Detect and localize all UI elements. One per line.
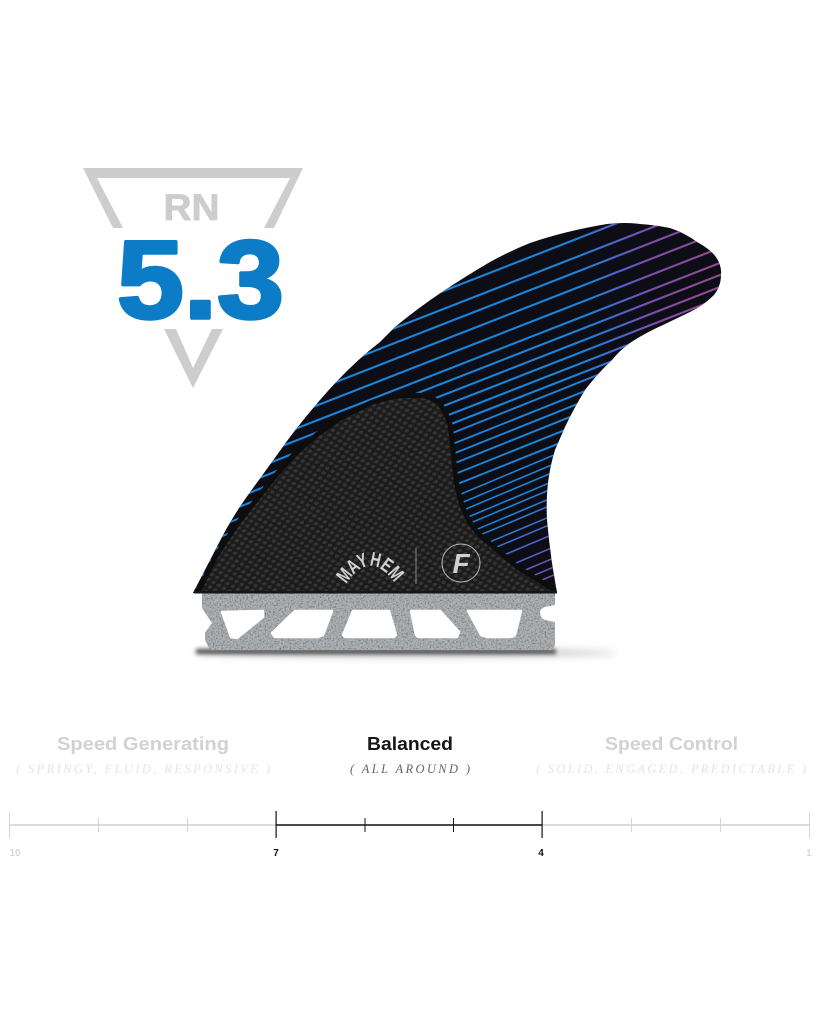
label: speed generating: Speed Generating bbox=[57, 733, 229, 754]
carbon weave panel bbox=[193, 398, 560, 596]
fin illustration bbox=[193, 223, 722, 650]
flex scale axis bbox=[9, 811, 812, 859]
label: balanced: Balanced bbox=[367, 733, 453, 754]
label: speed generating bbox=[16, 733, 270, 776]
base cut-out 5 bbox=[468, 611, 521, 637]
label: speed control: Speed Control bbox=[605, 733, 738, 754]
fin body with pinstripes bbox=[193, 223, 722, 593]
dark seam between fin and base bbox=[194, 591, 557, 594]
axis number 1: 1 bbox=[806, 848, 812, 859]
middle pinstripes bbox=[194, 373, 599, 590]
infographic canvas bbox=[9, 168, 812, 856]
carbon panel black border bbox=[193, 398, 560, 596]
rating number: 5.3 bbox=[117, 219, 284, 342]
label: speed control: ( SOLID, ENGAGED, PREDICTABLE ) bbox=[536, 762, 806, 776]
lower pinstripes bbox=[461, 454, 554, 580]
badge triangle bottom piece bbox=[164, 329, 223, 388]
base cut-out 1 bbox=[222, 611, 263, 638]
Mayhem logo: MAYHEM bbox=[336, 552, 404, 584]
rating badge: RN 5.3 bbox=[83, 168, 303, 388]
badge triangle top piece bbox=[83, 168, 303, 228]
label: balanced: ( ALL AROUND ) bbox=[350, 762, 470, 776]
label: speed generating: ( SPRINGY, FLUID, RESPONSIVE ) bbox=[16, 762, 270, 776]
Futures logo bbox=[442, 544, 480, 582]
flex scale labels bbox=[16, 733, 806, 776]
fin base with foam texture and five cut-outs bbox=[202, 593, 555, 650]
label: balanced bbox=[350, 733, 470, 776]
base cut-out 3 bbox=[343, 611, 396, 637]
logo divider bbox=[416, 548, 417, 584]
shadow under fin bbox=[193, 649, 617, 656]
base cut-out 2 bbox=[272, 611, 332, 637]
upper pinstripes bbox=[239, 223, 722, 508]
badge label RN: RN bbox=[164, 187, 220, 228]
axis number 7: 7 bbox=[273, 848, 279, 859]
axis number 4: 4 bbox=[538, 848, 544, 859]
label: speed control bbox=[536, 733, 806, 776]
axis number 10: 10 bbox=[9, 848, 21, 859]
base cut-out 4 bbox=[411, 611, 459, 637]
Futures logo: F bbox=[452, 548, 470, 579]
